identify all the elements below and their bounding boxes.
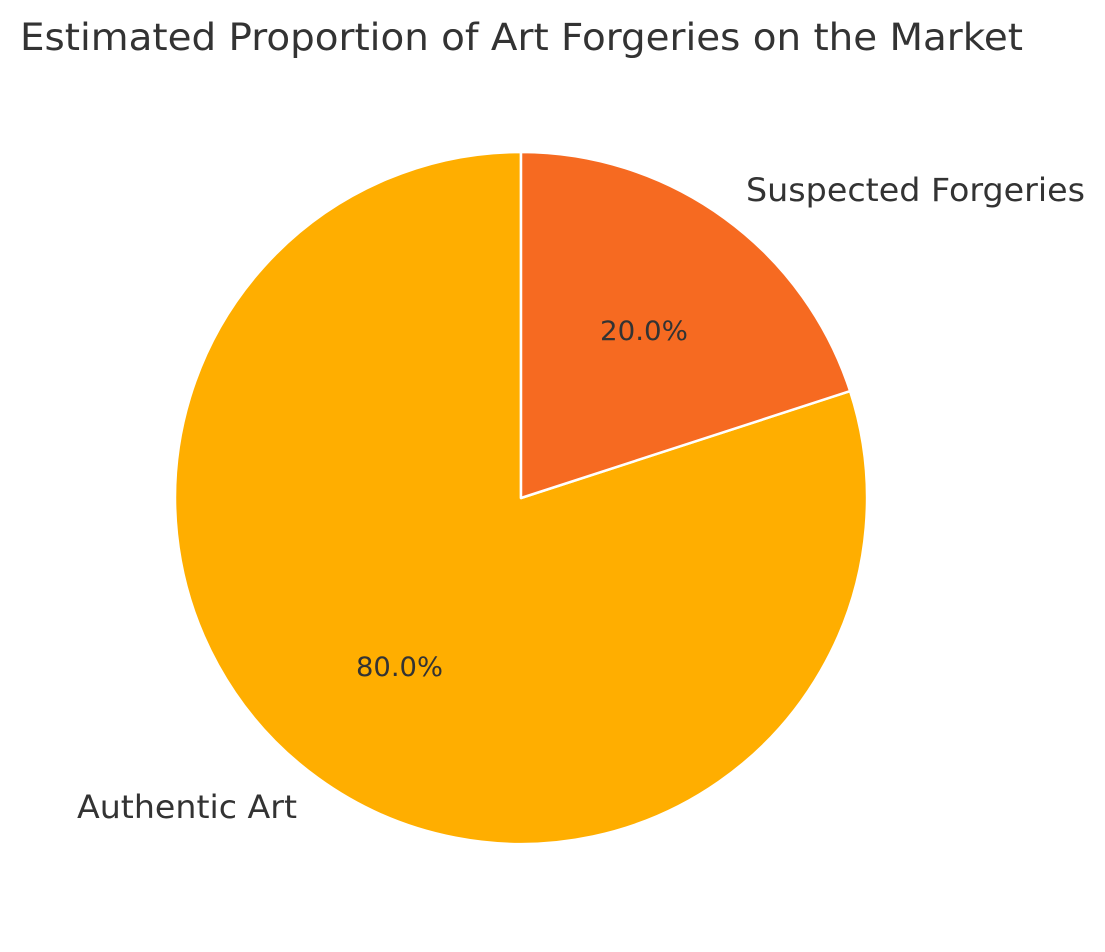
pie chart: [175, 152, 867, 844]
title: Estimated Proportion of Art Forgeries on the Market: [20, 16, 1023, 59]
slice: authentic art: [175, 152, 867, 844]
percent label: 80.0%: 80.0%: [356, 652, 443, 683]
percent label: 20.0%: 20.0%: [600, 316, 688, 347]
label: suspected forgeries: Suspected Forgeries: [746, 171, 1085, 209]
label: authentic art: Authentic Art: [77, 788, 297, 826]
slice: suspected forgeries: [521, 152, 850, 498]
